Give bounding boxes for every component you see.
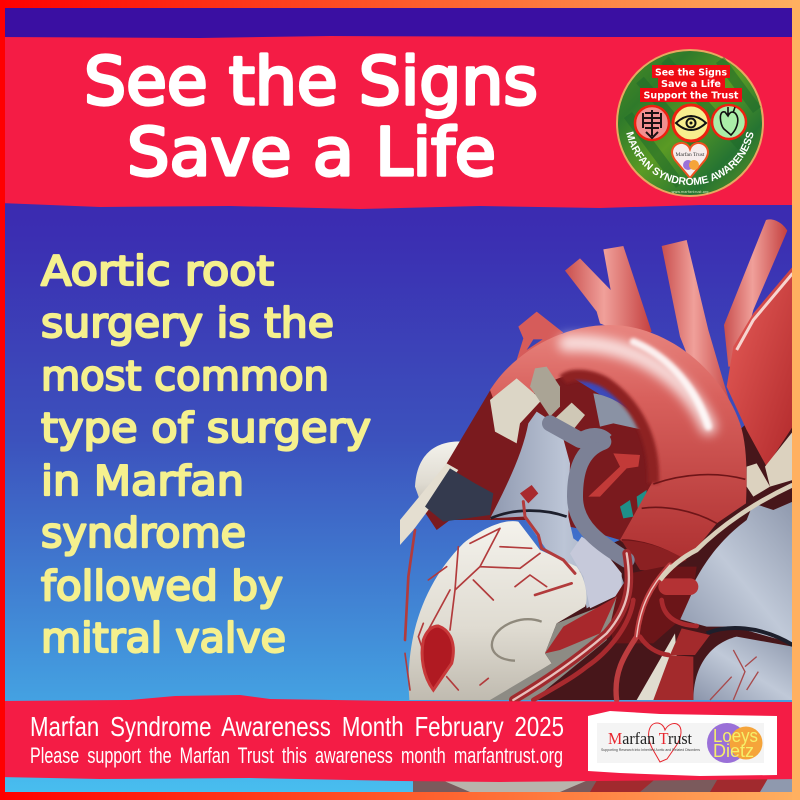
logo white backing — [588, 711, 777, 776]
statement line 2: surgery is the — [41, 299, 334, 347]
right grey ventricle — [677, 502, 793, 643]
badge web address: www.marfantrust.org — [671, 190, 709, 194]
black lower seam — [707, 628, 793, 645]
Loeys Dietz logo: Dietz — [713, 741, 754, 761]
aortic arch — [490, 325, 747, 570]
cream lower panel — [637, 633, 677, 700]
heart remnant below footer — [413, 775, 792, 792]
arch soft highlight — [567, 343, 708, 427]
badge curved caption: MARFAN SYNDROME AWARENESS — [626, 132, 754, 186]
maroon wedge under aorta — [607, 567, 697, 643]
right great vessel — [724, 219, 787, 367]
statement line 6: syndrome — [41, 509, 246, 557]
inner red strip — [545, 597, 617, 653]
title line 1: See the Signs — [84, 43, 538, 120]
Loeys Dietz logo — [707, 723, 762, 763]
lower grey panel under body — [490, 597, 617, 700]
dark strut — [425, 468, 493, 522]
eye icon — [673, 105, 709, 141]
small veins lower right — [710, 650, 758, 700]
lavender appendage — [570, 537, 622, 608]
tube link — [580, 435, 607, 440]
coronary vessels — [405, 502, 575, 690]
Marfan Trust logo — [601, 723, 700, 762]
red flap in cavity — [588, 453, 640, 497]
footer banner — [0, 695, 800, 782]
anatomical heart icon — [712, 105, 746, 139]
logo grey inner panel — [597, 723, 764, 763]
title — [84, 43, 538, 191]
badge heart logo — [672, 143, 708, 178]
badge label line 1: See the Signs — [655, 68, 727, 78]
heart illustration — [400, 219, 793, 700]
grey atrium — [490, 412, 625, 608]
arch segment seams — [622, 475, 745, 560]
window in small vessel — [527, 339, 543, 350]
footer line 2: Please support the Marfan Trust this awareness month marfantrust.org — [30, 743, 563, 768]
Marfan Trust logo: Supporting Research into Inherited Aortic and Related Disorders — [601, 747, 700, 752]
grey tube — [550, 423, 627, 560]
statement line 4: type of surgery — [41, 404, 371, 452]
middle vessel — [662, 240, 733, 413]
large right red chamber — [727, 267, 793, 467]
teal detail — [620, 490, 647, 518]
Marfan Trust logo: Marfan Trust — [608, 729, 692, 748]
arch specular highlight — [633, 342, 708, 427]
branching red tubes — [616, 565, 697, 700]
badge label text — [644, 68, 739, 102]
statement line 3: most common — [41, 352, 329, 400]
cream rib upper right — [747, 432, 793, 497]
cavity grey interior — [593, 393, 643, 430]
cream clamp blocks — [490, 378, 542, 443]
second cream clamp — [530, 367, 560, 417]
highlight on right chamber — [737, 273, 793, 350]
red plate — [653, 628, 710, 700]
badge label line 3: Support the Trust — [644, 90, 739, 102]
lower right grey chamber — [693, 637, 793, 700]
statement line 1: Aortic root — [41, 247, 274, 295]
badge heart logo: Marfan Trust — [676, 151, 705, 158]
pale heart body — [409, 521, 587, 700]
top purple band — [0, 8, 800, 38]
Loeys Dietz logo: Loeys — [713, 726, 758, 746]
Y branch vessel — [565, 246, 652, 340]
badge label line 2: Save a Life — [661, 79, 721, 90]
cream strap — [660, 485, 793, 580]
black seam — [491, 511, 567, 518]
heart opening — [422, 626, 453, 690]
skeleton icon — [635, 106, 669, 140]
statement line 5: in Marfan — [41, 457, 244, 505]
third cream clamp — [555, 403, 585, 432]
footer text — [30, 711, 564, 768]
statement line 7: followed by — [41, 562, 283, 610]
logo panel — [588, 711, 777, 776]
valve ring outline — [492, 619, 542, 661]
red arterial bud — [520, 485, 538, 503]
left shell cap — [415, 442, 463, 510]
footer line 1: Marfan Syndrome Awareness Month February 2025 — [30, 711, 564, 742]
badge disc — [617, 50, 763, 196]
arch shadow — [563, 375, 653, 483]
lower aorta dark segment — [622, 541, 687, 572]
title line 2: Save a Life — [127, 114, 496, 191]
awareness badge — [616, 49, 764, 197]
title banner — [0, 36, 800, 209]
badge diagonal stripes — [628, 60, 757, 185]
cream strut — [400, 463, 458, 545]
long red tubes — [513, 553, 633, 700]
statement line 8: mitral valve — [41, 614, 286, 662]
dark backdrop behind lower heart — [500, 423, 793, 700]
small left vessel — [517, 312, 563, 360]
main statement — [41, 247, 371, 662]
badge red label — [640, 65, 742, 102]
dark inner cavity — [423, 370, 657, 540]
